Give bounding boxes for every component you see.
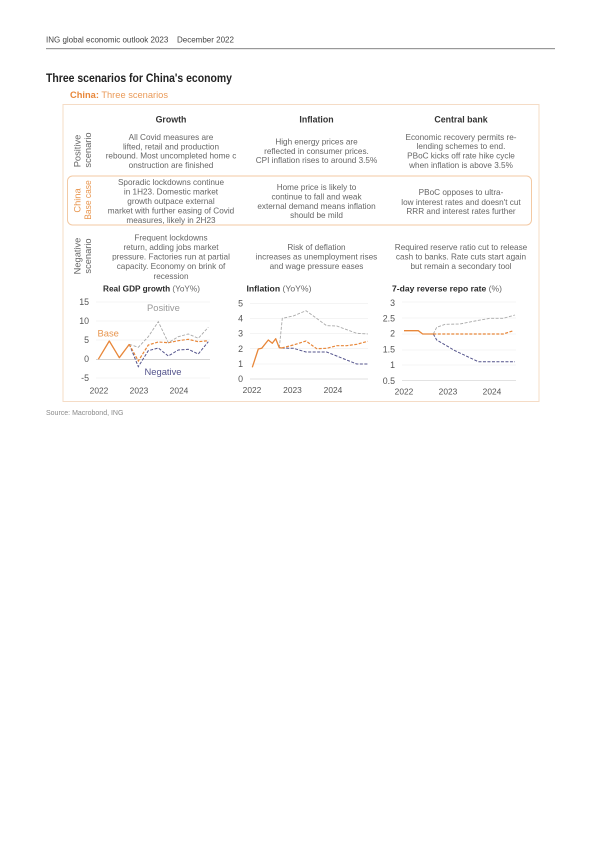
- line chart: real GDP growth: 15: [79, 297, 89, 307]
- text: base inflation: continue to fall and weak: [271, 192, 362, 202]
- text: base central bank: low interest rates and doesn't cut: [401, 198, 521, 207]
- line chart: inflation: 4: [238, 314, 243, 324]
- text: base growth: [108, 178, 235, 225]
- line chart: real GDP growth: -5: [81, 373, 89, 383]
- line chart: real GDP growth: Negative: [144, 366, 182, 377]
- line chart: inflation: 2: [238, 344, 243, 354]
- text: negative growth: capacity. Economy on brink of: [117, 262, 226, 271]
- text: negative growth: [112, 234, 230, 281]
- row label: negative scenario: Negative: [72, 238, 82, 274]
- row label: positive scenario: scenario: [83, 132, 93, 168]
- text: base inflation: Home price is likely to: [277, 183, 357, 192]
- text: negative growth: return, adding jobs market: [123, 243, 219, 252]
- line chart: 7-day reverse repo rate: 2024: [483, 386, 502, 396]
- line chart: inflation: Inflation (YoY%): [246, 284, 312, 294]
- row label: China base case: Base case: [83, 180, 93, 220]
- row label: positive scenario: [72, 132, 93, 168]
- column headings: [156, 114, 488, 124]
- line chart: 7-day reverse repo rate: 0.5: [383, 376, 395, 386]
- line chart: 7-day reverse repo rate: 1.5: [383, 344, 395, 354]
- text: base growth: Sporadic lockdowns continue: [118, 178, 224, 187]
- text: negative growth: pressure. Factories run at partial: [112, 252, 230, 262]
- line chart: 7-day reverse repo rate: [383, 284, 516, 396]
- line chart: 7-day reverse repo rate: 2023: [439, 386, 458, 396]
- text: positive inflation: High energy prices are: [275, 138, 358, 146]
- column headings: Central bank: [434, 114, 488, 124]
- line chart: real GDP growth: [79, 284, 210, 396]
- line chart: real GDP growth: 5: [84, 335, 89, 345]
- text: base growth: growth outpace external: [127, 197, 215, 206]
- text: negative central bank: but remain a secondary tool: [410, 262, 512, 271]
- row label: negative scenario: [72, 238, 93, 274]
- page header: ING global economic outlook 2023: [46, 36, 169, 44]
- row label: negative scenario: scenario: [83, 238, 93, 274]
- row label: positive scenario: Positive: [72, 135, 82, 167]
- line chart: inflation: 5: [238, 298, 243, 308]
- line chart: inflation: 2023: [283, 385, 302, 395]
- line chart: real GDP growth: 2022: [90, 386, 109, 396]
- text: positive central bank: [405, 133, 517, 170]
- text: positive growth: All Covid measures are: [129, 133, 214, 142]
- text: positive inflation: reflected in consumer prices.: [264, 147, 369, 156]
- source note: Source: Macrobond, ING: [46, 410, 123, 417]
- text: base growth: measures, likely in 2H23: [126, 216, 216, 225]
- line chart: inflation: 1: [238, 359, 243, 369]
- text: negative central bank: Required reserve ratio cut to release: [395, 243, 528, 252]
- row label: China base case: China: [72, 188, 82, 213]
- text: positive growth: onstruction are finished: [129, 161, 214, 170]
- column headings: Inflation: [299, 114, 334, 124]
- chart panel heading: China: Three scenarios: [70, 90, 168, 100]
- title: Three scenarios for China's economy: [46, 71, 232, 85]
- text: positive inflation: CPI inflation rises to around 3.5%: [256, 156, 377, 165]
- text: negative inflation: Risk of deflation: [287, 243, 346, 252]
- panel: base case highlight: [68, 176, 532, 225]
- line chart: inflation: 3: [238, 328, 243, 338]
- text: positive growth: [106, 133, 236, 170]
- text: negative inflation: and wage pressure eases: [270, 262, 363, 271]
- line chart: inflation: 2022: [243, 385, 262, 395]
- line chart: real GDP growth: 2023: [130, 386, 149, 396]
- row label: China base case: [72, 180, 93, 220]
- line chart: 7-day reverse repo rate: 2022: [395, 386, 414, 396]
- line chart: 7-day reverse repo rate: 3: [390, 298, 395, 308]
- text: base growth: market with further easing of Covid: [108, 206, 235, 216]
- line chart: real GDP growth: Real GDP growth (YoY%): [103, 284, 200, 294]
- page header: December 2022: [177, 36, 234, 44]
- line chart: 7-day reverse repo rate: 2.5: [383, 314, 395, 324]
- text: negative growth: recession: [153, 272, 189, 281]
- text: negative central bank: [395, 243, 528, 271]
- text: base inflation: external demand means inflation: [257, 202, 376, 211]
- text: positive central bank: when inflation is above 3.5%: [408, 161, 513, 170]
- text: positive central bank: PBoC kicks off rate hike cycle: [407, 152, 515, 160]
- line chart: inflation: 0: [238, 374, 243, 384]
- line chart: inflation: 2024: [324, 385, 343, 395]
- panel: scenario table and charts: [63, 104, 539, 402]
- column headings: Growth: [156, 114, 186, 124]
- line chart: real GDP growth: Base: [98, 328, 119, 338]
- text: base inflation: should be mild: [290, 211, 343, 220]
- text: positive growth: lifted, retail and production: [123, 142, 219, 152]
- text: base inflation: [257, 183, 376, 220]
- text: positive central bank: Economic recovery permits re-: [405, 133, 517, 142]
- text: negative inflation: increases as unemployment rises: [256, 252, 377, 262]
- text: base central bank: PBoC opposes to ultra-: [419, 188, 504, 197]
- line chart: real GDP growth: 2024: [170, 386, 189, 396]
- line chart: real GDP growth: Positive: [147, 302, 180, 313]
- text: negative growth: Frequent lockdowns: [134, 234, 208, 242]
- text: base central bank: RRR and interest rates further: [406, 207, 516, 216]
- line chart: real GDP growth: 0: [84, 354, 89, 364]
- line chart: 7-day reverse repo rate: 7-day reverse repo rate (%): [392, 284, 502, 294]
- text: positive inflation: [256, 138, 377, 165]
- text: negative central bank: cash to banks. Rate cuts start again: [396, 252, 527, 262]
- line chart: inflation: [238, 284, 368, 395]
- line chart: 7-day reverse repo rate: 1: [390, 360, 395, 370]
- text: base growth: in 1H23. Domestic market: [124, 188, 219, 196]
- text: positive central bank: lending schemes to end.: [417, 142, 505, 151]
- text: base central bank: [401, 188, 521, 216]
- line chart: 7-day reverse repo rate: 2: [390, 328, 395, 338]
- line chart: real GDP growth: 10: [79, 316, 89, 326]
- text: positive growth: rebound. Most uncompleted home c: [106, 152, 236, 160]
- text: negative inflation: [256, 243, 377, 271]
- page header: [46, 36, 555, 49]
